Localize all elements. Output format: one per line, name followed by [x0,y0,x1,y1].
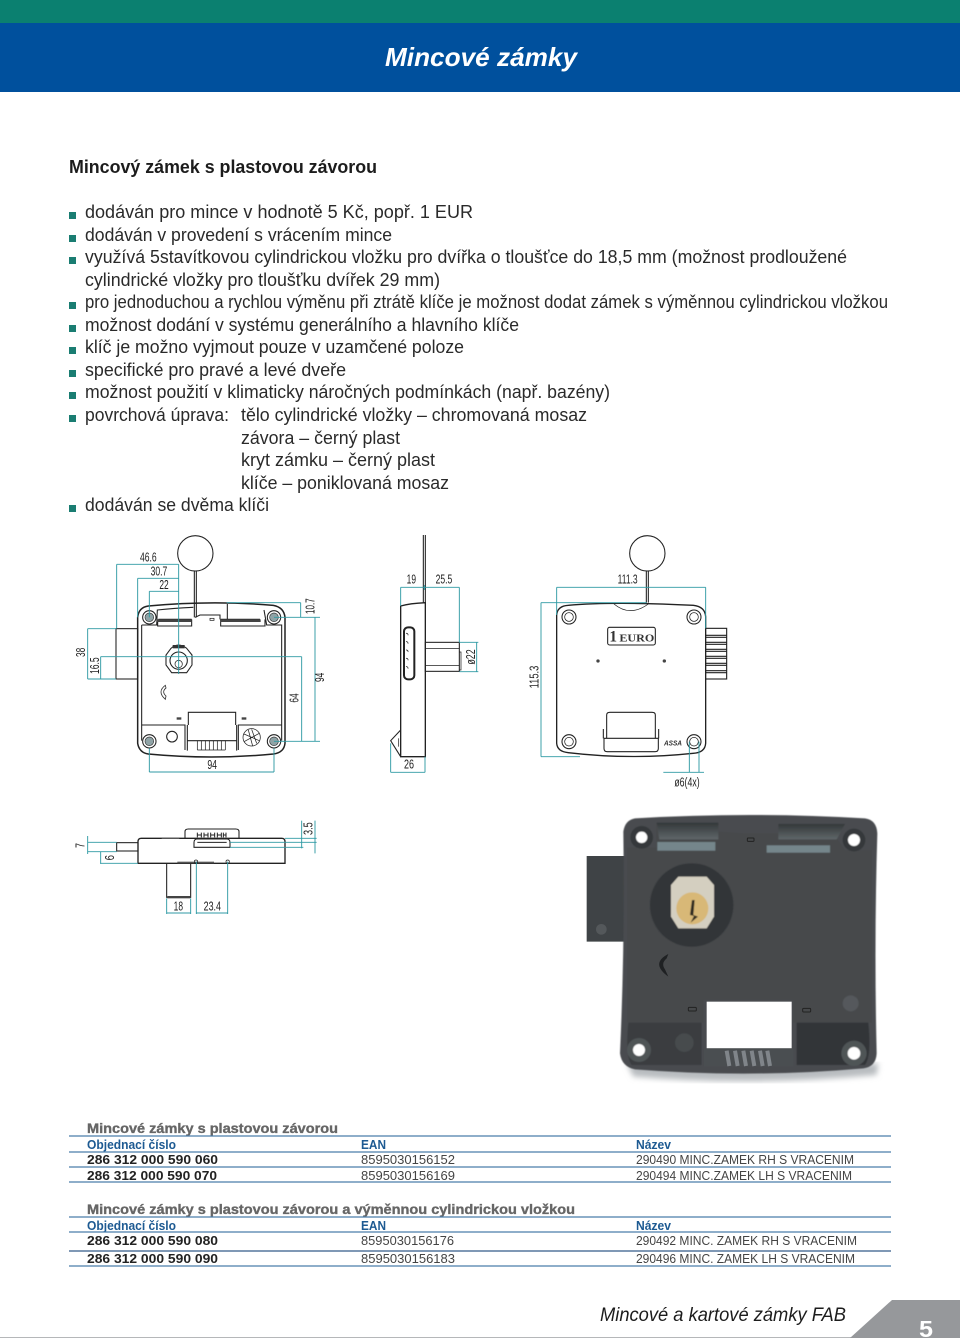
page title: Mincové zámky [385,42,579,72]
rear view dimensions [541,587,706,772]
rear view lock: ASSA [663,740,682,747]
order table 1: Název [636,1138,671,1152]
rear view lock [557,536,727,757]
order table 1: Objednací číslo [87,1138,176,1152]
order table 1: 286 312 000 590 060 [87,1152,218,1167]
footer title: Mincové a kartové zámky FAB [600,1305,846,1326]
feature bullet list: povrchová úprava: [85,405,229,425]
technical drawing: side and rear views [391,535,727,790]
feature bullet list: využívá 5stavítkovou cylindrickou vložku pro dvířka o tloušťce do 18,5 mm (možnost prodloužené [85,247,847,267]
front view lock body [116,536,285,757]
key cylinder [650,863,733,947]
top view dimensions [88,821,317,914]
feature bullet list: tělo cylindrické vložky – chromovaná mosaz [241,405,587,425]
feature bullet list: závora – černý plast [241,428,400,448]
top view dimension labels: 3.5 [301,822,315,835]
top view dimension labels: 18 [174,900,183,914]
feature bullet list: dodáván se dvěma klíči [85,495,269,515]
order table 2: 286 312 000 590 080 [87,1233,218,1248]
order table 2: EAN [361,1219,386,1233]
feature bullet list: možnost použití v klimaticky náročných podmínkách (např. bazény) [85,382,610,402]
ribbed coin slide [704,1048,793,1067]
rear view lock: 1 [609,629,617,646]
technical drawing: top view [73,821,317,914]
order table 2: Název [636,1219,671,1233]
top view dimension labels: 7 [73,843,87,848]
coin window [707,1002,792,1048]
side view dimension labels [404,573,478,772]
feature bullet list: dodáván v provedení s vrácením mince [85,225,392,245]
front view dimension labels: 46.6 [140,550,157,564]
front view dimensions [88,564,320,772]
front view dimension labels: 30.7 [151,564,167,578]
front view dimension labels: 94 [313,673,327,682]
side view dimension labels: 19 [407,573,416,587]
feature bullet list: možnost dodání v systému generálního a hlavního klíče [85,315,519,335]
top view dimension labels: 23.4 [204,900,221,914]
rear view lock: EURO [619,633,655,644]
header band [0,0,960,92]
order table 1: 8595030156152 [361,1153,455,1167]
order table 1 [69,1121,891,1183]
feature bullet list: klíč je možno vyjmout pouze v uzamčené poloze [85,337,464,357]
front view dimension labels: 22 [159,578,169,592]
side view dimensions [391,585,478,772]
table 2 title: Mincové zámky s plastovou závorou a výměnnou cylindrickou vložkou [87,1202,575,1217]
photo shadow [627,1063,878,1081]
front view dimension labels: 10.7 [304,598,318,614]
order table 1: 290490 MINC.ZAMEK RH S VRACENIM [636,1153,854,1167]
top view dimension labels: 9 [102,855,116,860]
footer page number tab [0,1300,960,1338]
feature bullet list: kryt zámku – černý plast [241,450,435,470]
order table 2: 290496 MINC. ZAMEK LH S VRACENIM [636,1252,855,1266]
feature bullet list: cylindrické vložky pro tloušťku dvířek 29 mm) [85,270,440,290]
feature bullet list: dodáván pro mince v hodnotě 5 Kč, popř. 1 EUR [85,202,473,222]
side view dimension labels: 26 [404,758,414,772]
feature bullet list [69,202,888,515]
top view lock [117,829,285,898]
product photo: coin lock [587,815,878,1081]
section heading: Mincový zámek s plastovou závorou [69,157,377,177]
front view dimension labels [74,550,327,772]
lock bolt [587,856,625,942]
top view dimension labels [73,822,315,914]
table 1 title: Mincové zámky s plastovou závorou [87,1121,338,1136]
technical drawing: front view [74,536,327,772]
feature bullet list: specifické pro pravé a levé dveře [85,360,346,380]
side view lock [391,535,461,757]
front view dimension labels: 38 [74,648,88,657]
order table 1: EAN [361,1138,386,1152]
order table 2: 8595030156176 [361,1234,454,1248]
order table 2: Objednací číslo [87,1219,176,1233]
feature bullet list: klíče – poniklovaná mosaz [241,473,449,493]
rear view dimension labels: 111.3 [618,573,638,587]
order table 1: 290494 MINC.ZAMEK LH S VRACENIM [636,1169,852,1183]
order table 2: 8595030156183 [361,1252,455,1266]
order table 2 [69,1202,891,1266]
rear view dimension labels [527,573,700,790]
side view dimension labels: ø22 [464,649,478,665]
rear view dimension labels: ø6(4x) [674,776,700,790]
side view dimension labels: 25.5 [436,573,452,587]
front view dimension labels: 64 [287,693,301,703]
lock body [620,815,877,1074]
logo notch [659,954,668,977]
order table 2: 290492 MINC. ZAMEK RH S VRACENIM [636,1234,857,1248]
front view dimension labels: 94 [207,758,217,772]
feature bullet list: pro jednoduchou a rychlou výměnu při ztrátě klíče je možnost dodat zámek s výměnnou cylindrickou vložkou [85,292,888,312]
order table 1: 8595030156169 [361,1169,455,1183]
rear view dimension labels: 115.3 [527,666,541,688]
front view dimension labels: 16.5 [88,657,102,674]
order table 2: 286 312 000 590 090 [87,1251,218,1266]
order table 1: 286 312 000 590 070 [87,1168,217,1183]
